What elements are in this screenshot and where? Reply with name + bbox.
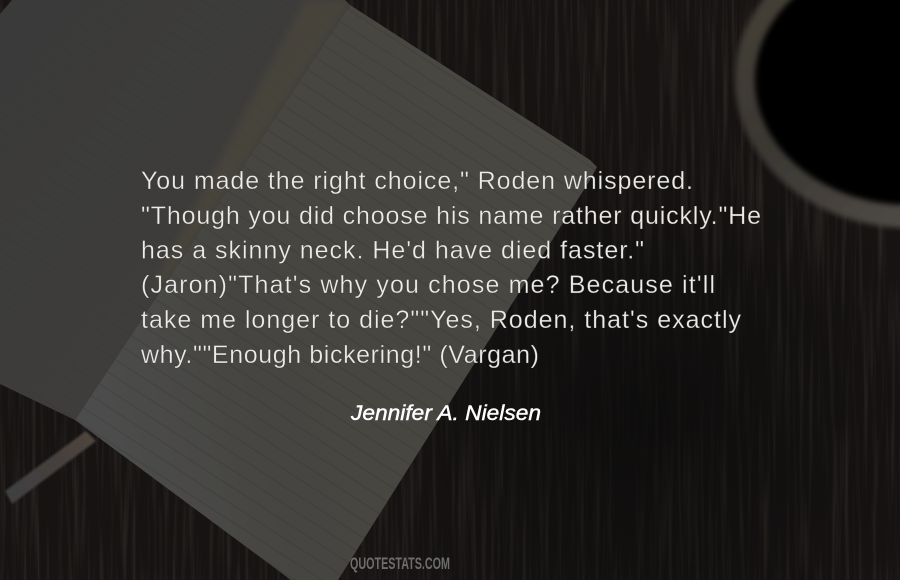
- quote text: "Though you did choose his name rather quickly."He: [141, 202, 761, 230]
- quote text: You made the right choice," Roden whispered.: [141, 167, 693, 195]
- coffee cup: [735, 0, 900, 228]
- warm shading along the spine: [150, 0, 348, 290]
- quote text: why.""Enough bickering!" (Vargan): [140, 341, 539, 369]
- quote text: has a skinny neck. He'd have died faster.": [141, 236, 644, 264]
- source watermark: QUOTESTATS.COM: [350, 554, 450, 573]
- open notebook: [0, 0, 597, 580]
- quote text: (Jaron)"That's why you chose me? Because it'll: [141, 271, 715, 299]
- left page: [0, 0, 350, 420]
- bookmark ribbon: [5, 431, 96, 504]
- quote text: [140, 167, 761, 369]
- quote text: take me longer to die?""Yes, Roden, that's exactly: [141, 306, 742, 334]
- right page: [75, 5, 597, 580]
- author name: Jennifer A. Nielsen: [350, 402, 541, 425]
